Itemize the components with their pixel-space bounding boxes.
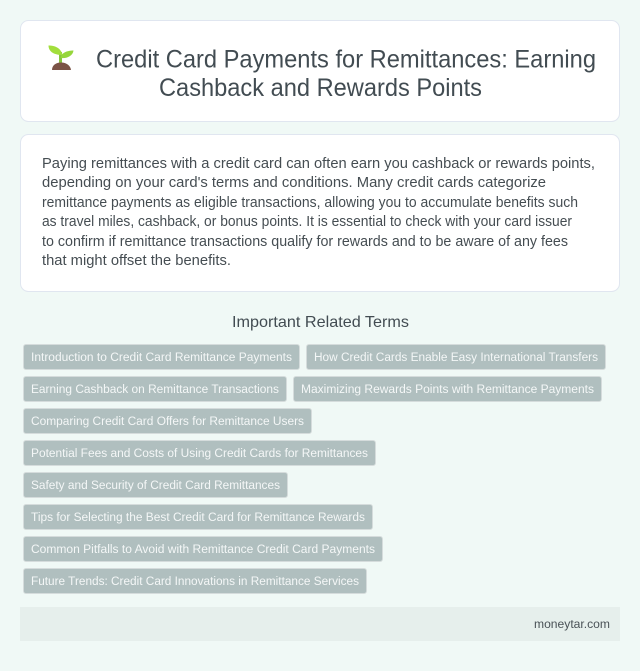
tag — [24, 440, 376, 466]
tag: Comparing Credit Card Offers for Remittance Users — [31, 414, 304, 428]
tag: Earning Cashback on Remittance Transactions — [31, 382, 279, 396]
title: Credit Card Payments for Remittances: Earning — [96, 46, 596, 74]
tag: Maximizing Rewards Points with Remittance Payments — [301, 382, 594, 396]
summary paragraph — [42, 156, 595, 269]
tag: Safety and Security of Credit Card Remittances — [31, 478, 280, 492]
summary paragraph: to confirm if remittance transactions qualify for rewards and to be aware of any fees — [42, 234, 568, 250]
tag: Common Pitfalls to Avoid with Remittance Credit Card Payments — [31, 542, 375, 556]
panel: summary text — [20, 134, 620, 292]
title — [96, 46, 596, 102]
tag — [24, 504, 372, 530]
footer: moneytar.com — [534, 617, 610, 631]
summary paragraph: as travel miles, cashback, or bonus points. It is essential to check with your card issuer — [42, 214, 572, 230]
tag — [306, 344, 606, 370]
heading: important related terms: Important Related Terms — [232, 314, 409, 331]
tag: Introduction to Credit Card Remittance Payments — [31, 350, 292, 364]
tag — [24, 472, 288, 498]
footer — [20, 607, 620, 641]
tag: Potential Fees and Costs of Using Credit Cards for Remittances — [31, 446, 368, 460]
tag — [24, 408, 312, 434]
tag — [24, 568, 366, 594]
tag — [24, 344, 300, 370]
tag group: related terms — [24, 344, 606, 594]
tag: How Credit Cards Enable Easy International Transfers — [314, 350, 598, 364]
summary paragraph: that might offset the benefits. — [42, 253, 231, 269]
title: Cashback and Rewards Points — [159, 74, 482, 102]
summary paragraph: depending on your card's terms and conditions. Many credit cards categorize — [42, 175, 546, 191]
tag — [24, 536, 382, 562]
tag — [24, 376, 286, 402]
panel: title header — [20, 20, 620, 122]
icon: seedling — [48, 46, 74, 70]
summary paragraph: remittance payments as eligible transactions, allowing you to accumulate benefits such — [42, 195, 578, 211]
tag — [294, 376, 602, 402]
summary paragraph: Paying remittances with a credit card can often earn you cashback or rewards points, — [42, 156, 595, 172]
tag: Future Trends: Credit Card Innovations in Remittance Services — [31, 574, 359, 588]
tag: Tips for Selecting the Best Credit Card for Remittance Rewards — [31, 510, 365, 524]
